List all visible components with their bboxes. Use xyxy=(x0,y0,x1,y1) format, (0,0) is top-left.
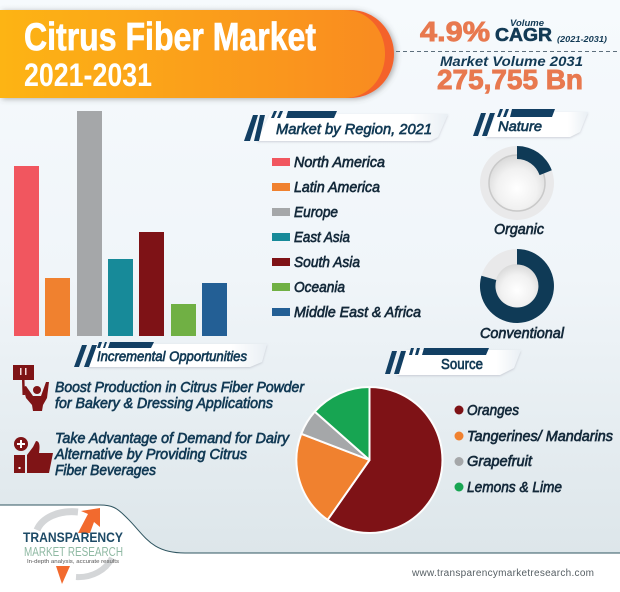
legend: source: Lemons & Lime xyxy=(467,479,562,496)
text: boost production: Boost Production in Citrus Fiber Powder xyxy=(55,380,305,396)
text: take advantage: Alternative by Providing Citrus xyxy=(54,447,247,463)
title banner xyxy=(0,10,394,98)
text: boost production: for Bakery & Dressing Applications xyxy=(55,396,273,412)
legend: source: Tangerines/ Mandarins xyxy=(467,428,613,445)
label: conventional: Conventional xyxy=(480,326,565,342)
CAGR stat xyxy=(420,16,607,47)
text: take advantage: Take Advantage of Demand for Dairy xyxy=(55,431,290,447)
market volume stat: Market Volume 2031 xyxy=(440,53,583,69)
heading: nature: Nature xyxy=(498,118,542,134)
legend: regions: Europe xyxy=(294,204,338,221)
text: take advantage xyxy=(54,431,290,479)
icon: thumbs up xyxy=(14,437,53,473)
heading: source: Source xyxy=(441,357,483,373)
legend: source: Grapefruit xyxy=(467,453,533,470)
CAGR stat: Volume xyxy=(510,18,545,29)
heading: market by region xyxy=(244,111,448,141)
bar chart xyxy=(14,111,227,336)
icon: protester with sign xyxy=(13,365,49,411)
market volume stat: 275,755 Bn xyxy=(437,64,583,95)
legend: source xyxy=(454,402,613,496)
heading: incremental opportunities xyxy=(74,342,267,367)
legend: regions: Latin America xyxy=(294,179,380,196)
pie chart: source xyxy=(296,387,442,533)
logo: transparency market research xyxy=(23,508,123,584)
text: boost production xyxy=(55,380,305,412)
website url: www.transparencymarketresearch.com xyxy=(411,568,594,579)
heading: source xyxy=(385,348,521,375)
text: take advantage: Fiber Beverages xyxy=(55,463,156,479)
heading: nature xyxy=(473,109,588,137)
legend: regions: Oceania xyxy=(294,279,345,296)
logo: transparency market research: In-depth analysis, accurate results xyxy=(27,559,120,565)
logo: transparency market research: MARKET RESEARCH xyxy=(24,544,123,559)
heading: market by region: Market by Region, 2021 xyxy=(276,121,432,138)
legend: regions: East Asia xyxy=(294,229,350,246)
title text: Citrus Fiber Market xyxy=(24,16,316,59)
donut: conventional xyxy=(480,249,554,323)
CAGR stat: 4.9% xyxy=(420,16,490,47)
CAGR stat: CAGR xyxy=(495,25,552,45)
logo: transparency market research: TRANSPARENCY xyxy=(23,530,123,545)
title years: 2021-2031 xyxy=(24,57,152,93)
legend: regions xyxy=(272,154,421,321)
heading: incremental opportunities: Incremental Opportunities xyxy=(97,349,247,364)
legend: regions: North America xyxy=(294,154,385,171)
label: organic: Organic xyxy=(494,222,545,238)
legend: regions: Middle East & Africa xyxy=(294,304,421,321)
legend: source: Oranges xyxy=(467,402,519,419)
CAGR stat: (2021-2031) xyxy=(557,35,607,44)
legend: regions: South Asia xyxy=(294,254,360,271)
donut: organic xyxy=(480,146,554,220)
